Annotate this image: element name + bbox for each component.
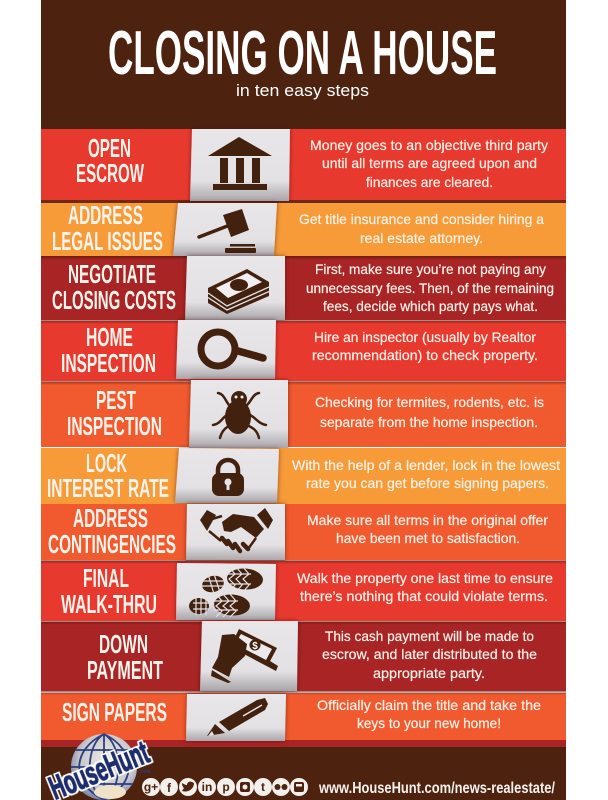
icon: hand with cash: $ — [252, 641, 258, 652]
subtitle: in ten easy steps — [236, 81, 369, 100]
step 7: address contingencies: ADDRESS — [73, 503, 148, 533]
step 4: home inspection: HOME — [86, 322, 133, 352]
step 3: negotiate closing costs: unnecessary fees. Then, of the remaining — [306, 280, 554, 296]
icon: bank — [208, 137, 272, 190]
logo: HouseHunt globe — [44, 733, 154, 800]
step 2: address legal issues: ADDRESS — [68, 200, 143, 230]
step 8: final walk-thru: WALK-THRU — [61, 589, 157, 619]
step 8: final walk-thru: Walk the property one last time to ensure — [297, 570, 553, 586]
icon: footprints — [189, 567, 264, 617]
step 8: final walk-thru: FINAL — [83, 563, 129, 593]
step 9: down payment — [41, 621, 566, 691]
step 7: address contingencies: CONTINGENCIES — [48, 529, 176, 559]
step 3: negotiate closing costs: CLOSING COSTS — [52, 285, 176, 315]
step 7: address contingencies: have been met to satisfaction. — [336, 530, 520, 546]
step 8: final walk-thru — [41, 560, 566, 621]
step 1: open escrow: ESCROW — [76, 158, 144, 188]
step 3: negotiate closing costs: First, make sure you’re not paying any — [315, 261, 546, 277]
icon: magnifying glass — [201, 332, 263, 366]
step 2: address legal issues: real estate attorney. — [360, 230, 483, 246]
social icons: p — [222, 780, 230, 794]
social icons: t — [261, 780, 265, 794]
social icons: in — [202, 780, 212, 794]
step 6: lock interest rate: rate you can get before signing papers. — [306, 475, 549, 491]
step 2: address legal issues: Get title insurance and consider hiring a — [299, 211, 544, 227]
step 1: open escrow: Money goes to an objective third party — [310, 137, 548, 153]
step 6: lock interest rate — [41, 448, 566, 504]
icon: gavel — [199, 209, 256, 253]
step 6: lock interest rate: LOCK — [86, 448, 127, 478]
step 10: sign papers: Officially claim the title and take the — [317, 697, 541, 713]
step 2: address legal issues — [41, 200, 566, 256]
step 1: open escrow: OPEN — [88, 133, 131, 163]
logo: HouseHunt globe: .com — [139, 769, 151, 775]
step 6: lock interest rate: INTEREST RATE — [47, 473, 169, 503]
step 9: down payment: escrow, and later distributed to the — [322, 646, 537, 662]
icon: pen — [207, 698, 268, 736]
step 2: address legal issues: LEGAL ISSUES — [52, 226, 163, 256]
step 7: address contingencies: Make sure all terms in the original offer — [307, 512, 548, 528]
step 1: open escrow — [41, 129, 566, 203]
social icons — [142, 778, 308, 796]
step 3: negotiate closing costs — [41, 256, 566, 320]
step 10: sign papers — [41, 691, 566, 747]
step 5: pest inspection — [41, 380, 566, 448]
icon: handshake — [200, 508, 273, 551]
step 1: open escrow: finances are cleared. — [366, 174, 493, 190]
step 10: sign papers: SIGN PAPERS — [62, 697, 167, 727]
step 5: pest inspection: PEST — [96, 385, 136, 415]
step 4: home inspection: recommendation) to check property. — [312, 347, 538, 363]
step 8: final walk-thru: there’s nothing that could violate terms. — [300, 588, 548, 604]
icon: bug — [213, 391, 266, 438]
icon: padlock — [212, 460, 244, 496]
step 6: lock interest rate: With the help of a lender, lock in the lowest — [292, 457, 560, 473]
step 3: negotiate closing costs: NEGOTIATE — [68, 259, 156, 289]
icon: hand with cash — [211, 629, 278, 683]
step 5: pest inspection: INSPECTION — [67, 411, 162, 441]
step 10: sign papers: keys to your new home! — [357, 715, 501, 731]
step 9: down payment: DOWN — [99, 629, 148, 659]
step 4: home inspection: INSPECTION — [61, 348, 156, 378]
icon: money stack — [208, 269, 269, 314]
step 5: pest inspection: separate from the home inspection. — [320, 414, 538, 430]
social icons: f — [167, 781, 172, 795]
step 9: down payment: PAYMENT — [87, 655, 163, 685]
step 3: negotiate closing costs: fees, decide which party pays what. — [323, 298, 538, 314]
header background — [41, 0, 566, 130]
step 9: down payment: This cash payment will be made to — [325, 628, 534, 644]
step 4: home inspection — [41, 320, 566, 381]
website url: www.HouseHunt.com/news-realestate/ — [318, 780, 555, 797]
step 7: address contingencies — [41, 503, 566, 561]
step 9: down payment: appropriate party. — [373, 665, 485, 681]
step 4: home inspection: Hire an inspector (usually by Realtor — [314, 329, 536, 345]
footer strip — [41, 738, 566, 800]
social icons: g+ — [144, 780, 158, 794]
step 1: open escrow: until all terms are agreed upon and — [322, 155, 537, 171]
step 5: pest inspection: Checking for termites, rodents, etc. is — [315, 394, 544, 410]
